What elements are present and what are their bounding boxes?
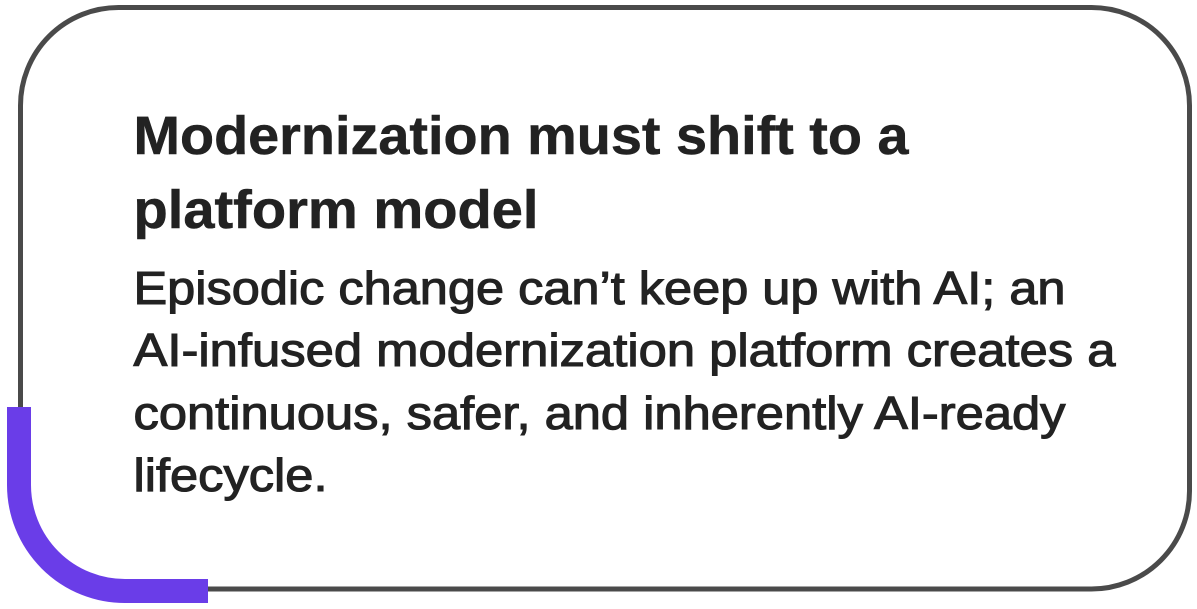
body text: AI-infused modernization platform creates a <box>134 324 1116 376</box>
heading <box>134 106 909 240</box>
body text <box>134 262 1116 501</box>
body text: Episodic change can’t keep up with AI; an <box>134 262 1066 314</box>
heading: Modernization must shift to a <box>134 106 909 166</box>
heading: platform model <box>134 180 538 240</box>
body text: lifecycle. <box>134 449 328 501</box>
accent: purple corner bracket <box>19 407 208 591</box>
body text: continuous, safer, and inherently AI-ready <box>134 387 1066 439</box>
